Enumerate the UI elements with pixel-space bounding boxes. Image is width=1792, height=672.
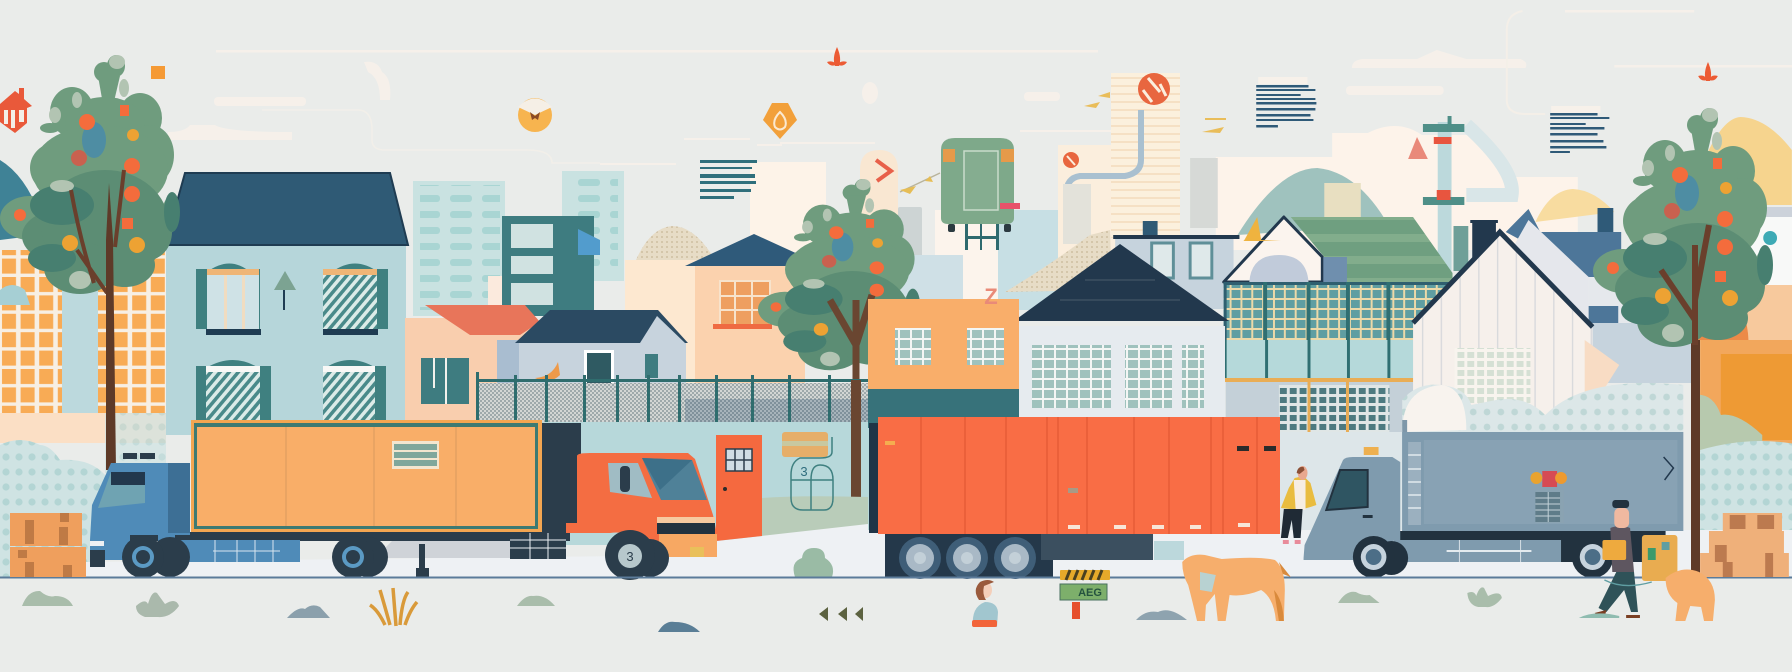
red door bbox=[716, 435, 762, 541]
wheels bbox=[122, 536, 388, 578]
lower right window bbox=[323, 360, 386, 422]
triple wheels bbox=[899, 537, 1036, 579]
green roof house with grid front bbox=[1113, 217, 1453, 432]
woman beside truck bbox=[1281, 466, 1316, 544]
box bbox=[1402, 420, 1683, 531]
vent and emblem bbox=[1530, 471, 1567, 523]
wheels bbox=[1353, 536, 1613, 578]
moving truck 1: orange trailer with blue cab bbox=[90, 420, 717, 580]
red house icon bbox=[0, 88, 32, 133]
left tree bbox=[0, 55, 180, 470]
man carrying box with backpack bbox=[1579, 500, 1677, 618]
Z mark on roof: Z bbox=[984, 284, 998, 309]
skyline: far left dome bbox=[0, 160, 40, 240]
mound bbox=[517, 596, 555, 606]
blue skirt bbox=[158, 533, 300, 562]
skyline: cream buildings centre bbox=[625, 150, 1058, 390]
red sprout icon left bbox=[827, 47, 847, 66]
ground line bbox=[0, 576, 1792, 578]
wall lamp bbox=[274, 271, 296, 310]
text-like lines: centre block bbox=[700, 160, 757, 199]
chain link fence bbox=[476, 372, 868, 510]
mound bbox=[1136, 610, 1187, 620]
grey house with dark roof bbox=[497, 310, 688, 395]
bush on road bbox=[794, 548, 833, 577]
envelope badge icon bbox=[518, 98, 552, 132]
middle tree bbox=[758, 179, 920, 512]
right orange wall and bush bbox=[1693, 340, 1792, 577]
left grid building bbox=[0, 250, 166, 577]
pale hedges behind grey truck bbox=[1280, 383, 1683, 532]
orange cab: 3 bbox=[626, 549, 634, 564]
trailer box bbox=[878, 417, 1280, 534]
person sitting in foreground bbox=[972, 580, 998, 627]
moving truck 2: red-orange trailer bbox=[869, 417, 1280, 579]
white gable house bbox=[1413, 232, 1619, 430]
mound bbox=[658, 622, 700, 632]
orange cab bbox=[566, 453, 717, 580]
blue house bbox=[165, 173, 408, 435]
text-like lines: upper right block bbox=[1256, 77, 1316, 128]
cardboard boxes left bbox=[10, 513, 86, 577]
blue cab bbox=[90, 453, 190, 567]
blue roof house behind white gable bbox=[1506, 208, 1693, 383]
crate and bubble on wall: 3 bbox=[800, 464, 808, 479]
sky decorations: lines and clouds left and centre bbox=[168, 50, 1132, 165]
chassis bbox=[1393, 531, 1666, 562]
mound bbox=[287, 605, 330, 618]
lower left window bbox=[196, 360, 271, 422]
text-like lines: right block bbox=[1550, 106, 1609, 153]
road sign bbox=[1060, 570, 1110, 619]
crate and bubble on wall bbox=[782, 432, 833, 510]
mound bbox=[1338, 592, 1380, 603]
cow left bbox=[1182, 555, 1291, 621]
road surface bbox=[85, 524, 1792, 577]
far right white building with teal bird bbox=[1693, 207, 1792, 340]
wall: grass patch bbox=[762, 496, 868, 538]
leaf plant bbox=[1467, 587, 1502, 607]
right background building chimney bbox=[1470, 220, 1498, 262]
moving truck 3: grey box truck bbox=[1304, 420, 1683, 578]
sky decorations: lines and clouds right bbox=[1346, 10, 1792, 114]
red sprout icon right bbox=[1698, 62, 1718, 81]
trailer box bbox=[191, 420, 581, 533]
upper right window bbox=[323, 264, 388, 335]
teal wall behind trucks bbox=[476, 420, 871, 545]
ground plants bbox=[22, 587, 1502, 632]
teal dome hill bbox=[1237, 168, 1388, 235]
right tree bbox=[1593, 108, 1773, 577]
dark teal building bbox=[502, 216, 600, 316]
skyline: cream block right bbox=[1190, 125, 1578, 250]
dark triangle roof house bbox=[1014, 244, 1229, 428]
skyline: cream tall tower with pipe bbox=[1005, 73, 1180, 292]
leaf plant bbox=[136, 592, 179, 617]
grey cab bbox=[1304, 447, 1400, 560]
mound bbox=[22, 591, 73, 606]
trailer underside bbox=[130, 532, 570, 578]
floating green tank bbox=[900, 138, 1020, 250]
cow right bbox=[1666, 570, 1715, 621]
skyline: pale towers left bbox=[413, 171, 624, 316]
red round icon on tower bbox=[1063, 73, 1170, 168]
peach house behind fence bbox=[685, 234, 805, 390]
signal tower bbox=[1408, 116, 1468, 277]
small yellow arrows bbox=[1084, 92, 1226, 133]
small peach house with red roof bbox=[405, 305, 540, 422]
golden grass bbox=[370, 588, 417, 626]
droplet badge icon bbox=[763, 103, 797, 139]
orange square icon bbox=[151, 66, 165, 79]
road sign: AEG bbox=[1078, 587, 1102, 599]
orange house bbox=[868, 284, 1019, 428]
upper left window bbox=[196, 264, 261, 335]
direction arrows bbox=[819, 607, 863, 621]
yellow hills right bbox=[1535, 117, 1792, 222]
red chevron icon bbox=[876, 160, 891, 181]
cardboard boxes right bbox=[1700, 513, 1789, 577]
blue house roof bbox=[165, 173, 408, 245]
